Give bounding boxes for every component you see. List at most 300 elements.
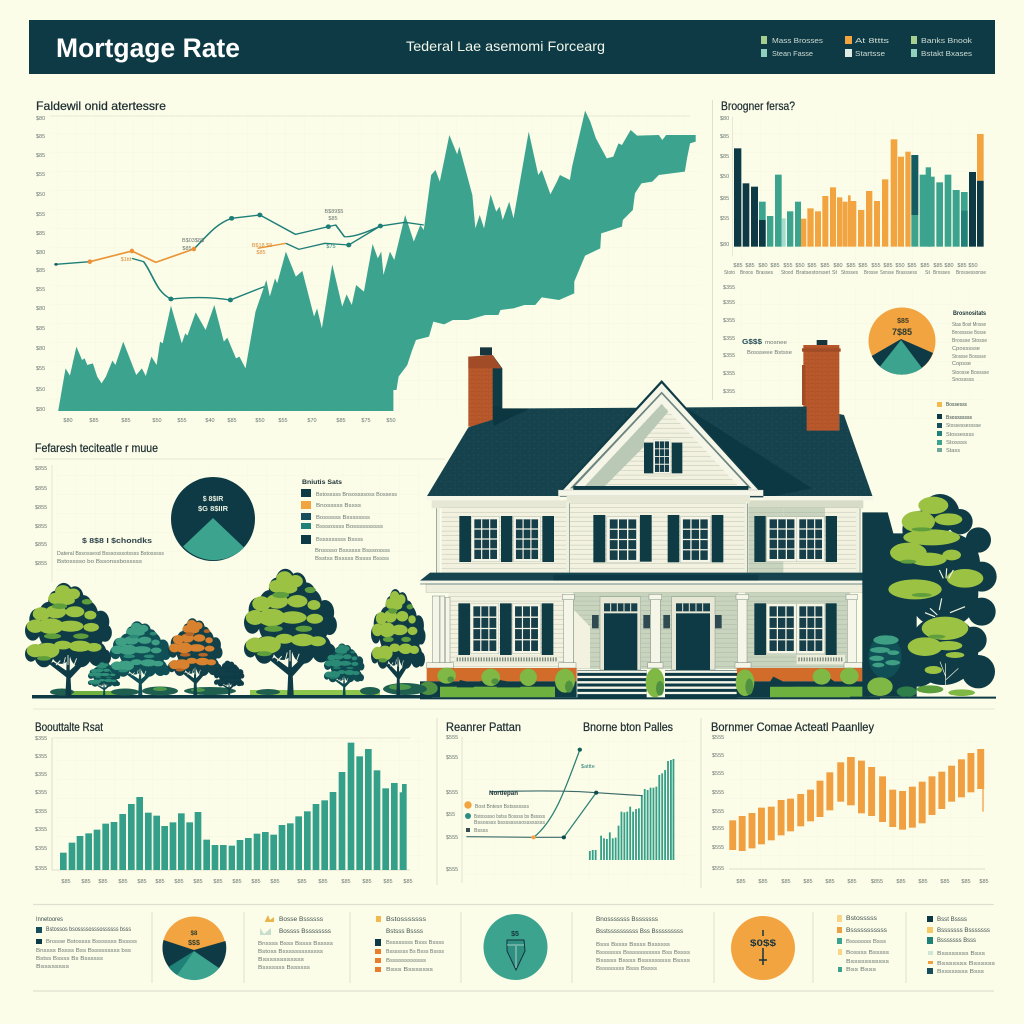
donut callout: Dateral Bssossesd Bsssosssotssss Bstosssss [57,551,164,557]
panel: borrower bar chart [712,99,986,400]
header legend: Stean Fasse [772,49,813,58]
columns [427,594,862,668]
annotations: $attte [581,764,595,770]
panel: federal area chart [36,99,700,424]
pie legend: Bnsssso Bssssss Bsssossss [315,548,390,554]
summary column 4: Bsstssssssssss Bss Bsssssssss [596,929,683,935]
pie chart: $$$ [188,940,200,947]
summary column 2: Bnssss Bsss Bssss Bsssss [258,941,333,947]
header legend: Startsse [855,49,885,58]
pie description [952,310,989,383]
section heading: Fefaresh teciteatle r muue [35,441,158,455]
y labels: $355 [723,371,735,377]
y axis labels: $55 [36,366,45,372]
pie chart: $85 [897,318,909,325]
pie legend: Bsstss Bsssss Bssss Bssss [315,556,389,562]
pie legend: Bossesss [946,402,967,408]
x captions: Brossessonse [956,270,986,276]
y labels: $55 [720,216,729,222]
line annotations [121,209,343,263]
x captions: Brosses [933,270,950,276]
y axis labels: $55 [36,287,45,293]
y labels: $355 [35,790,47,796]
x labels: $80 [944,263,954,269]
range bars [729,749,984,851]
x axis labels: $85 [89,418,99,424]
pie legend: Bsssossss Bossssssssss [316,524,383,530]
x captions: Stosses [841,270,858,276]
roof [427,407,873,508]
x labels: $85 [758,879,768,885]
annotations: Bstosssso bstss Bossss bs Bsssss [474,814,545,820]
pie legend: Stossessesssse [946,423,981,429]
x labels: $85 [251,879,261,885]
y labels: $555 [712,845,724,851]
y labels: $355 [723,318,735,324]
x labels: $85 [362,879,372,885]
y labels: $355 [35,846,47,852]
summary column 4: Bssssssss Bsss Bssss [596,966,657,972]
x labels: $85 [803,879,813,885]
y axis labels: $50 [36,387,45,393]
pie description: Stoosse Bosssse [952,370,989,376]
y labels: $85 [720,196,729,202]
x axis labels: $85 [227,418,237,424]
y labels: $355 [723,353,735,359]
porch roof [420,573,872,592]
y axis labels: $55 [36,172,45,178]
y axis labels: $80 [36,250,45,256]
summary column 3 [375,916,444,973]
y labels: $855 [35,524,47,530]
y labels: $355 [723,336,735,342]
y labels: $555 [712,753,724,759]
x captions: St [925,270,930,276]
x labels: $85 [940,879,950,885]
y labels: $85 [720,134,729,140]
x labels: $85 [736,879,746,885]
tree near house [371,589,426,695]
large right tree [888,494,997,695]
summary column 6: Bsst Bssss [937,917,967,923]
summary column 3: Bssssssss Bsss Bssss [386,940,444,946]
line annotations: $85 [182,246,192,252]
donut callout [57,536,164,565]
x labels: $85 [403,879,413,885]
y labels: $80 [720,116,729,122]
pie legend: Bstosssss Bnsossssoss Bossess [316,492,397,498]
annotations: Bssossss bssssssssossssssss [474,820,545,826]
x labels: $85 [745,263,755,269]
y labels: $55 [446,812,455,818]
pie chart: 7$85 [892,327,912,337]
summary column 1: Innetoores [36,917,63,923]
pie callout text: G$$$ [742,339,762,346]
x labels: $55 [871,263,881,269]
heading: Bornmer Comae Acteatl Paanlley [711,720,874,734]
y axis labels: $85 [36,134,45,140]
x captions: Bratsestorsset [796,270,830,276]
pie callout text: mosnee [765,340,787,346]
summary column 2: Bosse Bssssss [279,917,323,923]
x labels: $85 [137,879,147,885]
summary column 4: Bnosssssss Bsssssss [596,917,658,923]
subtitle: Tederal Lae asemomi Forcearg [406,38,605,54]
summary column 6 [927,916,995,975]
x labels: $85 [297,879,307,885]
panel: borrower pie chart [723,285,989,454]
rate trend lines [54,213,424,302]
ground strip [32,683,432,698]
line annotations: $75 [326,244,336,250]
summary column 5: Bsssssss Bsss [846,939,886,945]
x axis labels: $50 [386,418,396,424]
x labels: $85 [341,879,351,885]
x labels: $85 [896,879,906,885]
summary column 2: Bsssssss Bssssss [258,965,310,971]
y labels: $555 [712,790,724,796]
x axis labels [63,418,396,424]
lawn [420,681,880,699]
donut callout: Bstosssso bo Bssonssbosssss [57,559,142,565]
pie chart: $ 8$IR [203,496,223,503]
panel: federal pie section [33,441,445,583]
y labels [712,735,724,872]
y labels: $355 [35,754,47,760]
panel heading: Broogner fersa? [721,99,795,113]
chart heading: Faldewil onid atertessre [36,99,166,113]
summary column 4: Bsssss Bssss Bsssssssss Bssss [596,958,690,964]
y labels [446,735,458,873]
y labels: $855 [35,561,47,567]
x captions: Brosse [864,270,878,276]
y labels: $355 [35,736,47,742]
x labels: $85 [213,879,223,885]
y labels: $355 [723,285,735,291]
y axis labels: $80 [36,407,45,413]
pie chart [868,308,936,375]
x labels: $85 [118,879,128,885]
x labels: $85 [61,879,71,885]
y labels: $355 [35,866,47,872]
x labels: $85 [807,263,817,269]
y labels: $555 [446,735,458,741]
y axis labels: $50 [36,192,45,198]
panel: borrower pattern chart [437,718,694,885]
pie chart: $G 8$IIR [198,504,229,513]
summary column 5: Bsssssssssss [846,959,889,965]
x labels: $85 [961,879,971,885]
x labels: $50 [795,263,805,269]
summary column 6: Bsssssss Bssssss [937,961,995,967]
x labels: $85 [270,879,280,885]
y labels: $555 [712,826,724,832]
small dark tree [214,661,244,695]
x captions: Stood [781,270,793,276]
vertical bars [732,117,984,256]
pie legend: Bossssss Bssssssss [316,515,370,521]
summary column 5: Bsssssssssss [846,928,887,934]
teal bars [589,759,674,860]
x captions [724,270,986,276]
porch floor walls [448,592,850,669]
x labels: $85 [846,263,856,269]
annotations: Bost Bntesn Bstsssosss [475,804,529,810]
y labels: $855 [35,542,47,548]
x labels: $85 [918,879,928,885]
right ground [850,697,996,699]
summary column 2: Bssssssssssss [258,957,304,963]
y labels [35,736,47,872]
x labels: $85 [957,263,967,269]
summary column 6: Bsssssss Bsss [937,938,976,944]
x labels: $85 [920,263,930,269]
panel: borrower orange floating bars [701,718,989,888]
summary column 5 [837,915,889,973]
summary column 6: Bsssssss Bsssssss [937,928,990,934]
y labels: $855 [35,505,47,511]
summary column 3: Bstsss Bssss [386,929,423,935]
x labels [61,879,413,885]
summary column 4: Bsssssss Bsssssssssss Bss Bssss [596,950,690,956]
pie legend: Stossss [946,440,967,446]
header legend: Banks Bnook [921,36,972,45]
header legend [761,36,972,58]
chimneys [468,340,841,431]
y labels: $555 [446,755,458,761]
summary column 3: Bstosssssss [386,917,426,923]
x labels [736,879,989,885]
x labels: $85 [781,879,791,885]
summary column 2 [258,915,333,971]
pie description: Brossse Stosse [952,338,987,344]
x labels [733,263,978,269]
pie legend: Bnosssss Bssss [316,503,361,509]
x labels: $85 [820,263,830,269]
donut callout: $ 8$8 I $chondks [82,536,152,545]
x labels: $85 [81,879,91,885]
porch windows [458,603,837,655]
small tree [88,662,120,695]
summary column 6: Bssssssss Bsss [937,969,984,975]
x labels: $85 [733,263,743,269]
y labels: $855 [35,486,47,492]
y labels: $50 [720,174,729,180]
summary column 4 [596,917,690,972]
x axis labels: $40 [205,418,215,424]
x axis labels: $50 [152,418,162,424]
y labels: $355 [35,827,47,833]
header legend: Mass Brosses [772,36,823,45]
y labels: $355 [723,300,735,306]
summary column 4: Bsss Bssss Bssss Bssssss [596,942,670,948]
y axis labels: $80 [36,116,45,122]
y axis labels: $55 [36,212,45,218]
y labels [720,116,729,248]
summary column 1: Bstossos bsossssosssossssss bsss [46,927,131,933]
summary column 2: Bossss Bssssssss [279,929,331,935]
x labels: $85 [193,879,203,885]
x labels: $85 [858,263,868,269]
annotations [464,764,595,834]
summary column 1: Bstss Bssss Bs Bssssss [36,956,103,962]
summary column 1: Bssssssss [36,964,69,970]
y labels: $355 [35,809,47,815]
house illustration [419,340,880,699]
y labels [35,466,47,567]
x labels: $85 [155,879,165,885]
summary column 3: Bsss Bsssssss [386,967,433,973]
x labels: $855 [871,879,883,885]
line annotations: B$03$8$ [182,238,204,244]
line annotations: $85 [328,216,338,222]
summary column 2: Bstoss Bsssssssssssss [258,949,323,955]
panel: borrower pattern chart: Bnorne bton Palles [583,720,673,734]
y labels: $555 [712,771,724,777]
x labels: $85 [383,879,393,885]
y axis labels: $85 [36,326,45,332]
summary column 1: Bnssss Bssss Bss Bsssssssss bss [36,948,131,954]
y labels: $855 [35,466,47,472]
pie legend [937,402,981,454]
y labels [723,285,735,395]
x labels: $80 [758,263,768,269]
header banner [29,20,995,74]
y axis labels: $85 [36,268,45,274]
x labels: $50 [968,263,978,269]
x labels: $85 [933,263,943,269]
x labels: $85 [232,879,242,885]
y labels: $555 [712,735,724,741]
y axis labels: $85 [36,153,45,159]
teal icon circle: $5 [511,931,519,938]
large tree [244,569,337,695]
summary column 5: Bossss Bsssss [846,950,889,956]
pie callout text: Bossseee Bstsse [747,350,792,356]
x labels: $85 [907,263,917,269]
pie legend: Stossessss [946,432,974,438]
header legend: Bstakt Bxases [921,49,972,58]
upper windows [459,515,837,563]
x axis labels: $55 [177,418,187,424]
pie callout text [742,339,792,356]
x labels: $85 [174,879,184,885]
y labels: $555 [446,790,458,796]
tree [25,583,112,695]
summary column 1 [36,917,137,970]
x captions: St [832,270,837,276]
y labels: $85 [720,154,729,160]
y axis labels: $80 [36,346,45,352]
orange icon circle: $0$$ [750,938,776,948]
header legend: At 8ttts [855,36,889,45]
x captions: Sonsse [880,270,894,276]
summary column 3: Bssssssssssss [386,958,426,964]
pie legend [301,479,397,562]
x labels: $85 [825,879,835,885]
y axis labels: $80 [36,306,45,312]
y labels: $80 [720,242,729,248]
small teal shrub [867,635,975,697]
x labels: $55 [783,263,793,269]
bottom summary strip [33,904,995,991]
x captions: Bnoos [740,270,753,276]
pie chart: $8 [191,931,198,937]
pie description: Stossse Bosssse [952,354,986,360]
x axis labels: $85 [121,418,131,424]
x captions: Brasses [756,270,773,276]
y labels: $555 [446,835,458,841]
front doors [592,597,722,670]
x labels: $85 [979,879,989,885]
pie legend: Bsosssssss [946,415,972,421]
foundation [427,668,867,681]
x captions: Brasssess [896,270,917,276]
y axis labels [36,116,45,413]
x labels: $85 [98,879,108,885]
y labels: $555 [712,866,724,872]
pie description: Copsse [952,361,971,367]
pie chart [171,477,255,561]
x axis labels: $55 [278,418,288,424]
orange icon circle [731,916,795,980]
title: Mortgage Rate [56,33,240,63]
summary column 6: Bssssssss Bsss [937,951,985,957]
x axis labels: $85 [336,418,346,424]
pie legend: Bniutis Sats [302,479,342,486]
x labels: $85 [318,879,328,885]
pie description: Stas Bost Mnsse [952,322,986,328]
summary column 5: Bstosssss [846,916,877,922]
small teal tree [324,643,364,695]
summary column 5: Bss Bsss [846,967,876,973]
tree group left [25,569,426,695]
x captions: Stoto [724,270,735,276]
x labels: $50 [895,263,905,269]
pie legend: Bsssssssss Bssss [316,537,363,543]
pie description: Snosssss [952,377,974,383]
panel: bottom-left bar chart [33,709,995,885]
x labels: $85 [770,263,780,269]
pie legend: Stass [946,448,960,454]
headings: Reanrer Pattan [446,720,521,734]
lines [466,748,643,839]
summary column 3: Bsssssss Bs Bsss Bssss [386,949,444,955]
x labels: $85 [883,263,893,269]
gable [557,380,763,503]
heading: Boouttalte Rsat [35,720,104,734]
x axis labels: $75 [361,418,371,424]
silhouette [862,512,917,697]
y labels: $555 [446,867,458,873]
y axis labels: $85 [36,231,45,237]
x axis labels: $50 [255,418,265,424]
pie description: Cpossssse [952,346,980,352]
teal bars [60,743,407,870]
teal tree [110,621,171,695]
y labels: $355 [723,389,735,395]
y labels: $555 [712,809,724,815]
teal area series [58,111,696,411]
steps [577,670,737,698]
foundation shrubs [419,668,859,697]
pie description: Brosnositats [953,310,986,317]
annotations: Nortlepan [489,790,518,797]
summary column 1: Bnssse Bstossss Bsssssss Bsssss [46,939,137,945]
rear building silhouette and right tree [850,494,997,699]
pie chart [162,916,226,980]
walls [437,503,860,573]
